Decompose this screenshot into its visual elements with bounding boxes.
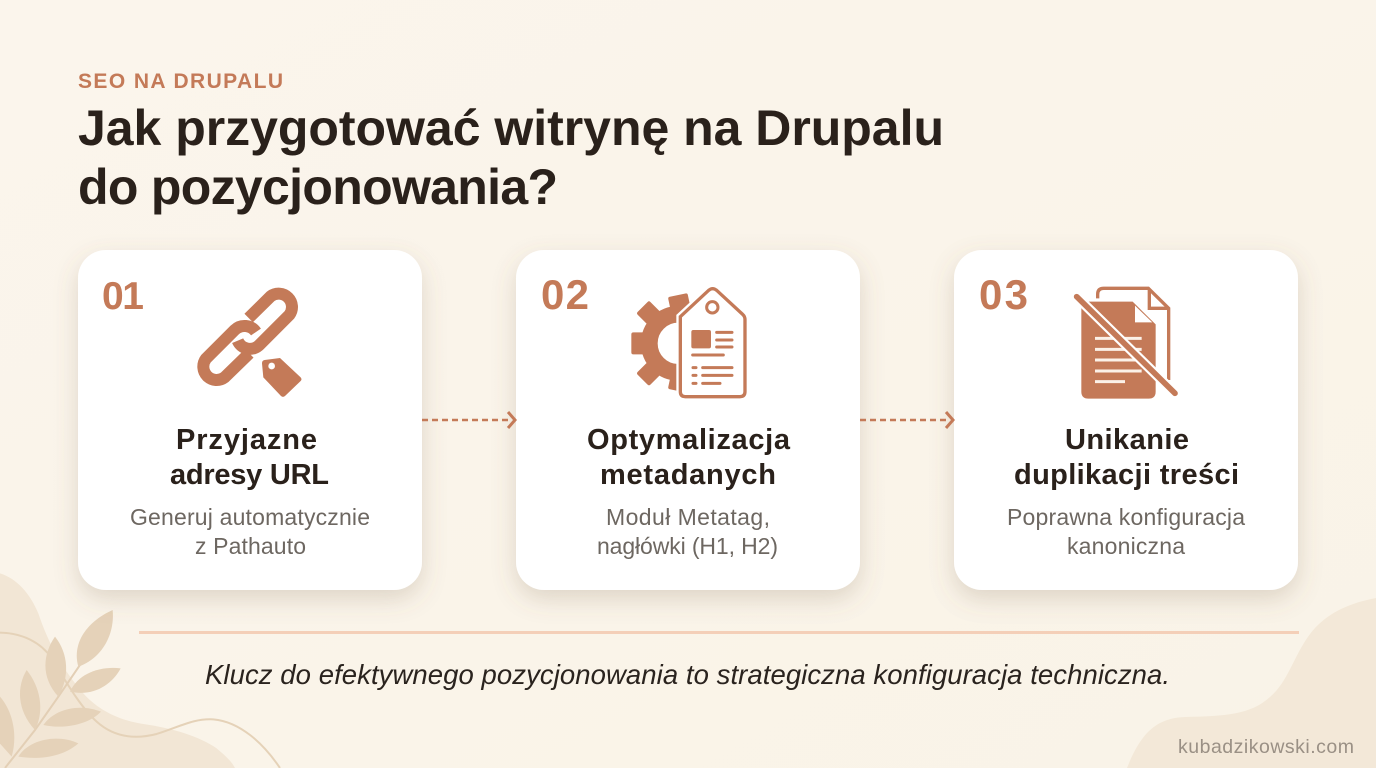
icon: chain link with tag (203, 294, 301, 397)
card description: Poprawna konfiguracja (1007, 504, 1245, 530)
card title (1014, 424, 1239, 491)
card description: Generuj automatycznie (130, 504, 370, 530)
card description: Moduł Metatag, (606, 504, 770, 530)
card description (1007, 504, 1245, 559)
decoration: left blob, curve and leaves (0, 573, 280, 768)
card title: Optymalizacja (587, 424, 791, 456)
watermark: kubadzikowski.com (1178, 736, 1354, 758)
card title: adresy URL (170, 459, 329, 491)
card description (597, 504, 778, 559)
divider (139, 631, 1299, 634)
card description (130, 504, 370, 559)
card title: duplikacji treści (1014, 459, 1239, 491)
card title: Unikanie (1065, 424, 1189, 456)
card description: kanoniczna (1067, 533, 1185, 559)
number 02: 02 (541, 271, 589, 318)
title: do pozycjonowania? (78, 159, 558, 215)
card title (170, 424, 329, 491)
icon: crossed out duplicate documents (1077, 288, 1175, 399)
card title: metadanych (600, 459, 776, 491)
title (78, 100, 944, 215)
decoration: right blob (1127, 598, 1376, 768)
number 01: 01 (102, 275, 144, 318)
title: Jak przygotować witrynę na Drupalu (78, 100, 944, 156)
card description: z Pathauto (195, 533, 306, 559)
arrow: card 2 to card 3 (860, 412, 953, 428)
closing statement: Klucz do efektywnego pozycjonowania to strategiczna konfiguracja techniczna. (205, 659, 1170, 690)
icon: gear with meta tag (631, 289, 745, 397)
number 03: 03 (979, 271, 1028, 318)
card description: nagłówki (H1, H2) (597, 533, 778, 559)
panel: card 3 (954, 250, 1298, 590)
arrow: card 1 to card 2 (422, 412, 515, 428)
eyebrow: SEO NA DRUPALU (78, 70, 283, 93)
card title: Przyjazne (176, 424, 317, 456)
panel: card 1 (78, 250, 422, 590)
card title (587, 424, 791, 491)
panel: card 2 (516, 250, 860, 590)
